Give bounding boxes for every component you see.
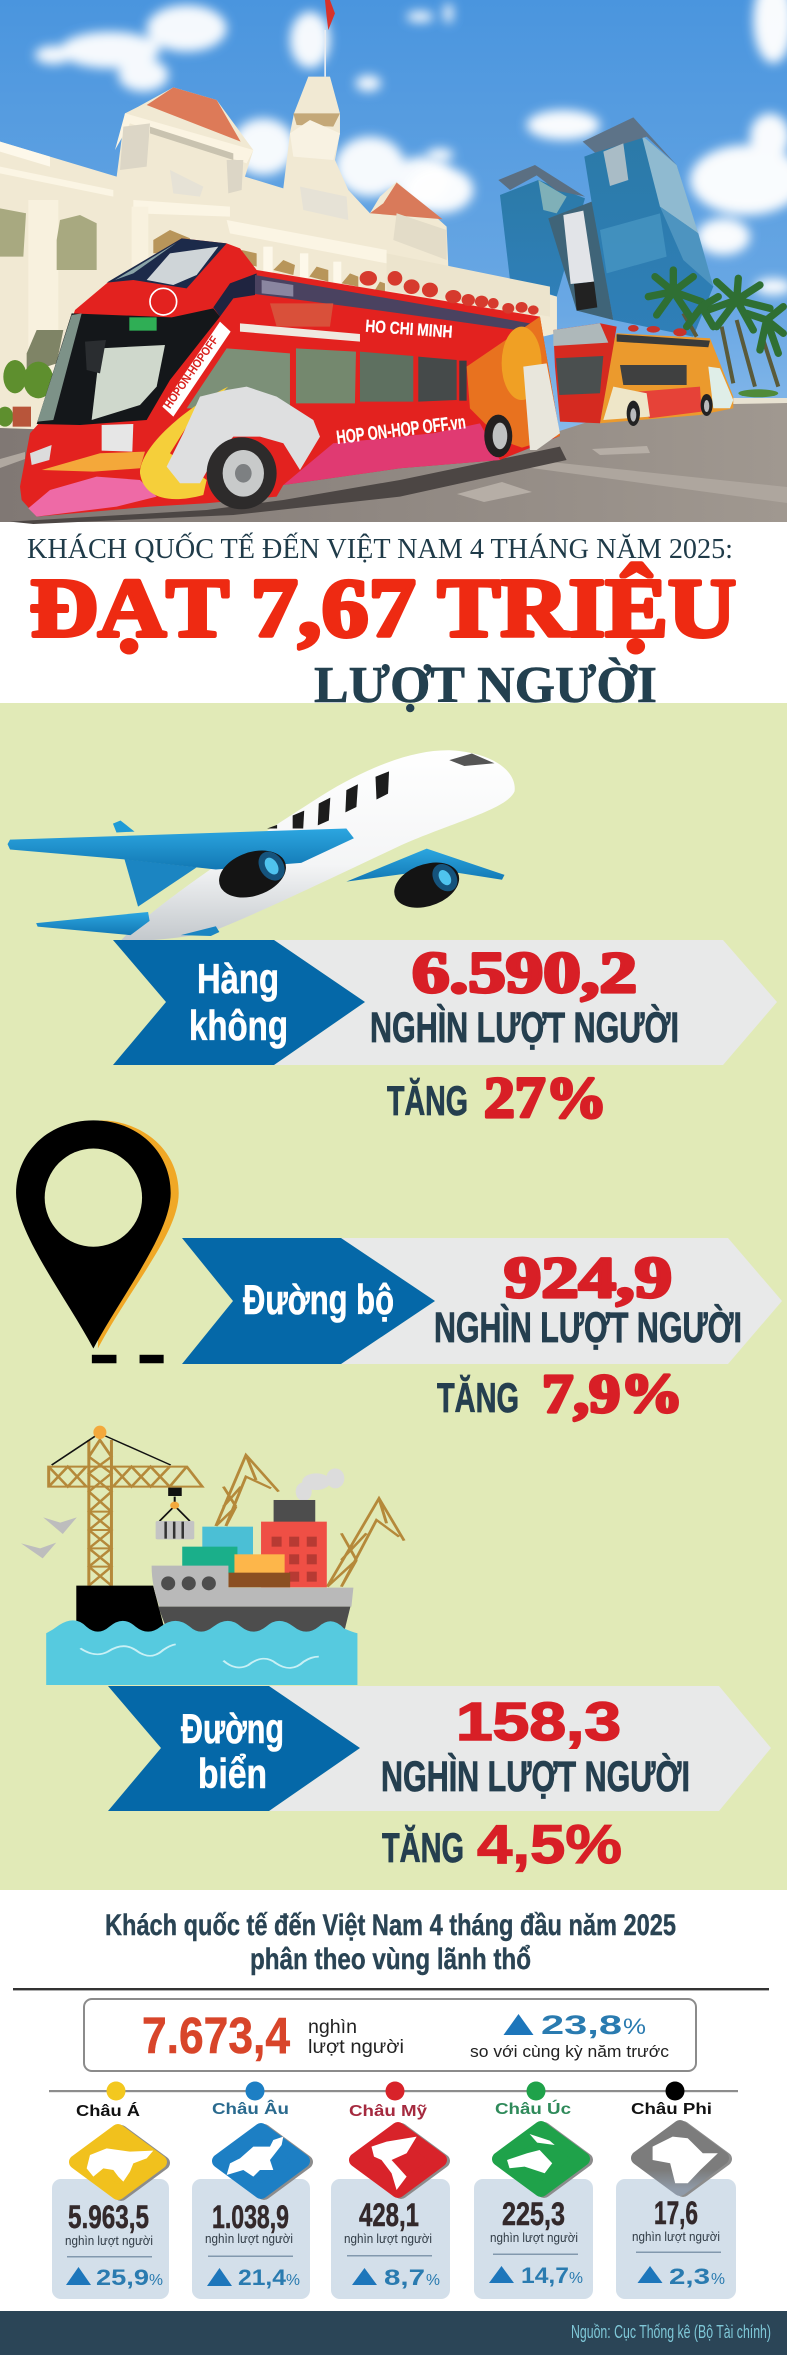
city hall building [0, 0, 557, 467]
region: Châu Úc: 225,3 [502, 2196, 565, 2232]
flag strip [240, 323, 360, 342]
region: Châu Phi: nghìn lượt người [632, 2229, 720, 2244]
region: Châu Mỹ: nghìn lượt người [344, 2231, 432, 2246]
footer source bar [0, 2311, 787, 2355]
total summary box [84, 1999, 696, 2071]
arrow banner: Đường bộ [182, 1238, 782, 1364]
medallion artwork [467, 317, 560, 448]
region: Châu Úc: 14,7 [521, 2263, 569, 2288]
green section background [0, 703, 787, 1890]
lower arches behind bus [27, 220, 550, 373]
value: 6.590,2 [412, 940, 637, 1005]
region: Châu Âu: % [286, 2272, 300, 2289]
growth: road: 7,9% [542, 1363, 683, 1424]
total summary box: 23,8 [541, 2010, 622, 2040]
growth: air: 27% [484, 1065, 607, 1130]
region: Châu Úc: nghìn lượt người [490, 2230, 578, 2245]
region: Châu Úc: % [569, 2270, 583, 2287]
growth: road [437, 1363, 683, 1424]
region: Châu Úc [474, 2082, 593, 2299]
region: Châu Mỹ: Châu Mỹ [349, 2103, 427, 2120]
growth: air [387, 1065, 607, 1130]
icon: airplane [8, 750, 515, 941]
arrow banner: Đường biển [108, 1686, 771, 1811]
road [0, 398, 787, 522]
title block [0, 533, 787, 1890]
growth: road: TĂNG [437, 1374, 519, 1421]
palm trees [648, 270, 783, 397]
region: Châu Mỹ: 8,7 [384, 2265, 425, 2290]
swoosh artwork [283, 423, 500, 485]
growth: air: TĂNG [387, 1077, 468, 1124]
region: Châu Phi: 17,6 [654, 2195, 698, 2231]
clouds [35, 3, 453, 203]
arrow banner: Hàng không: không [189, 1002, 288, 1049]
growth: sea: 4,5% [477, 1813, 622, 1875]
region: Châu Âu: nghìn lượt người [205, 2231, 293, 2246]
main tour bus [10, 238, 567, 524]
region: Châu Phi: % [711, 2271, 725, 2288]
main tour bus: HO CHI MINH [365, 316, 453, 342]
title headline: ĐẠT 7,67 TRIỆU [30, 562, 736, 655]
label: Hàng [197, 955, 279, 1002]
total unit: nghìn [308, 2017, 357, 2038]
region: Châu Âu: Châu Âu [212, 2099, 289, 2118]
hero photo: tour bus in front of city hall [0, 0, 787, 524]
region: Châu Phi [616, 2082, 736, 2299]
arrow banner: Hàng không [113, 940, 777, 1065]
region: Châu Á: 25,9 [96, 2265, 149, 2290]
region: Châu Âu [192, 2082, 310, 2299]
growth: sea [382, 1813, 622, 1875]
region: Châu Âu: 21,4 [238, 2265, 287, 2290]
label: Đường [181, 1705, 284, 1752]
region: Châu Á: 5.963,5 [68, 2199, 149, 2235]
region: Châu Á: nghìn lượt người [65, 2233, 153, 2248]
main tour bus: HOP ON-HOP OFF.vn [335, 412, 467, 449]
title kicker: KHÁCH QUỐC TẾ ĐẾN VIỆT NAM 4 THÁNG NĂM 2025: [27, 533, 733, 565]
label: Đường bộ [243, 1276, 394, 1323]
side windows [187, 348, 290, 408]
region: Châu Mỹ: % [426, 2272, 440, 2289]
bushes left of bus [0, 360, 53, 427]
growth: sea: TĂNG [382, 1824, 464, 1871]
total value: 7.673,4 [142, 2007, 291, 2064]
region: Châu Á: Châu Á [76, 2101, 141, 2120]
region: Châu Mỹ: 428,1 [359, 2197, 419, 2233]
regional section heading: phân theo vùng lãnh thổ [250, 1943, 531, 1976]
total summary box: lượt người [308, 2037, 404, 2058]
region: Châu Á: % [149, 2272, 163, 2289]
icon: port with cranes and cargo ship [21, 1426, 404, 1685]
value: 158,3 [456, 1692, 621, 1752]
total summary box: % [623, 2014, 646, 2039]
arrow banner: Đường biển: biển [198, 1750, 267, 1797]
region: Châu Phi: Châu Phi [631, 2101, 712, 2118]
region: Châu Úc: Châu Úc [495, 2099, 571, 2118]
icon: map pin [16, 1120, 179, 1363]
regional section heading [105, 1909, 676, 1976]
region: Châu Á [52, 2082, 169, 2299]
second tour bus [553, 323, 733, 426]
main tour bus: HOPON-HOPOFF [161, 333, 221, 411]
total summary box: so với cùng kỳ năm trước [470, 2042, 670, 2061]
total growth [504, 2014, 534, 2035]
region: Châu Phi: 2,3 [669, 2264, 710, 2289]
office towers [498, 117, 713, 337]
value: 924,9 [504, 1245, 672, 1310]
bus lettering [162, 322, 231, 417]
region: Châu Mỹ [331, 2082, 450, 2299]
region: Châu Âu: 1.038,9 [212, 2199, 289, 2235]
title subline: LƯỢT NGƯỜI [314, 656, 657, 714]
